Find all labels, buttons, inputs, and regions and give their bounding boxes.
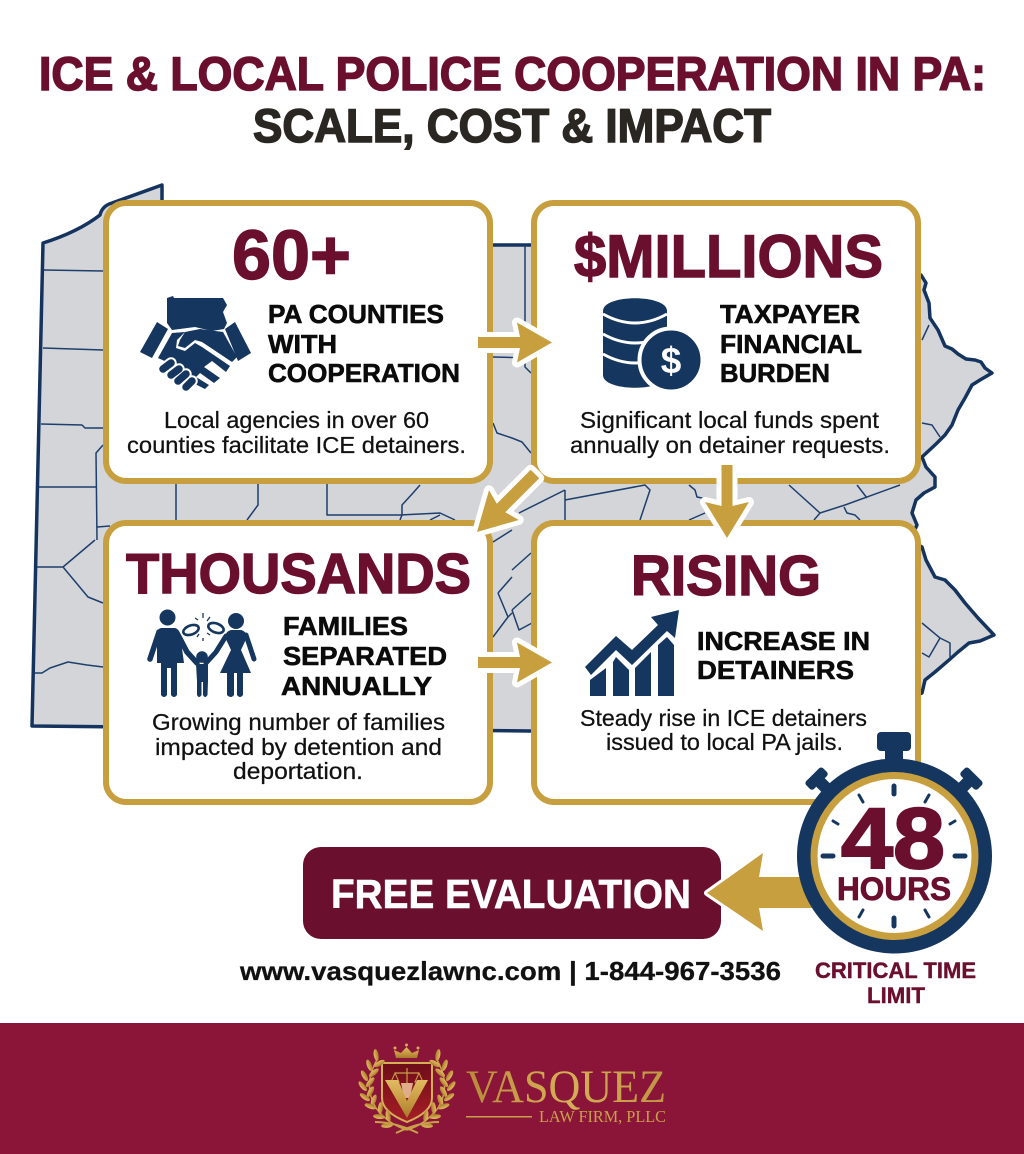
subheading: COOPERATION bbox=[268, 358, 460, 388]
body text bbox=[570, 407, 890, 458]
body text: Growing number of families bbox=[152, 709, 445, 735]
body text: counties facilitate ICE detainers. bbox=[127, 432, 466, 458]
arrow: thousands to rising bbox=[478, 642, 552, 682]
subheading: TAXPAYER bbox=[720, 299, 860, 329]
heading: RISING: RISING bbox=[631, 544, 821, 608]
body text bbox=[152, 709, 445, 784]
body text: Significant local funds spent bbox=[580, 407, 880, 433]
timer number: 48 bbox=[841, 791, 945, 887]
icon: coin stack with dollar bbox=[603, 298, 702, 392]
subheading: SEPARATED bbox=[283, 641, 447, 671]
heading: $MILLIONS: $MILLIONS bbox=[574, 223, 883, 290]
card: thousands bbox=[106, 523, 490, 802]
arrow: stopwatch to button bbox=[707, 853, 815, 931]
arrow: 60+ to millions bbox=[478, 322, 552, 362]
subheading bbox=[268, 299, 460, 388]
timer label: HOURS bbox=[837, 871, 951, 907]
heading: THOUSANDS: THOUSANDS bbox=[126, 542, 471, 606]
body text: issued to local PA jails. bbox=[606, 729, 843, 755]
body text bbox=[580, 705, 867, 755]
icon: separated family bbox=[150, 610, 254, 697]
icon: coin stack with dollar: $ bbox=[661, 340, 682, 381]
caption: critical time limit bbox=[815, 958, 976, 1008]
card: rising bbox=[534, 523, 918, 802]
logo emblem bbox=[357, 1044, 457, 1133]
body text: annually on detainer requests. bbox=[570, 432, 890, 458]
stopwatch: 48 hours bbox=[797, 732, 992, 954]
caption: critical time limit: CRITICAL TIME bbox=[815, 958, 976, 983]
caption: critical time limit: LIMIT bbox=[867, 983, 926, 1008]
arrow: millions to rising bbox=[705, 465, 749, 538]
map of Pennsylvania bbox=[32, 185, 994, 731]
subheading bbox=[281, 611, 447, 701]
body text: impacted by detention and bbox=[155, 734, 442, 760]
title: SCALE, COST & IMPACT bbox=[253, 99, 771, 152]
heading: 60+: 60+ bbox=[232, 216, 351, 294]
body text: Steady rise in ICE detainers bbox=[580, 705, 867, 731]
contact line: www.vasquezlawnc.com | 1-844-967-3536 bbox=[239, 956, 781, 986]
body text: Local agencies in over 60 bbox=[164, 407, 429, 433]
title: ICE & LOCAL POLICE COOPERATION IN PA: bbox=[39, 47, 986, 100]
card: $millions bbox=[534, 203, 918, 481]
subheading: BURDEN bbox=[720, 358, 830, 388]
subheading: DETAINERS bbox=[697, 655, 854, 685]
subheading: ANNUALLY bbox=[281, 671, 432, 701]
card: 60+ counties bbox=[106, 203, 490, 481]
body text bbox=[127, 407, 466, 458]
button: free evaluation: FREE EVALUATION bbox=[331, 871, 691, 917]
subheading bbox=[720, 299, 862, 388]
footer band bbox=[0, 1023, 1024, 1154]
title bbox=[39, 47, 986, 152]
subheading: WITH bbox=[268, 329, 337, 359]
subheading: INCREASE IN bbox=[697, 626, 870, 656]
icon: handshake with PA map bbox=[140, 296, 251, 389]
button: free evaluation bbox=[303, 847, 721, 939]
subheading bbox=[697, 626, 870, 685]
subheading: PA COUNTIES bbox=[268, 299, 444, 329]
logo wordmark: LAW FIRM, PLLC bbox=[539, 1107, 666, 1126]
body text: deportation. bbox=[233, 758, 363, 784]
arrow: millions to thousands bbox=[462, 459, 550, 547]
subheading: FINANCIAL bbox=[720, 329, 862, 359]
icon: rising bar chart bbox=[585, 610, 679, 696]
logo wordmark: VASQUEZ bbox=[466, 1061, 666, 1113]
subheading: FAMILIES bbox=[283, 611, 408, 641]
